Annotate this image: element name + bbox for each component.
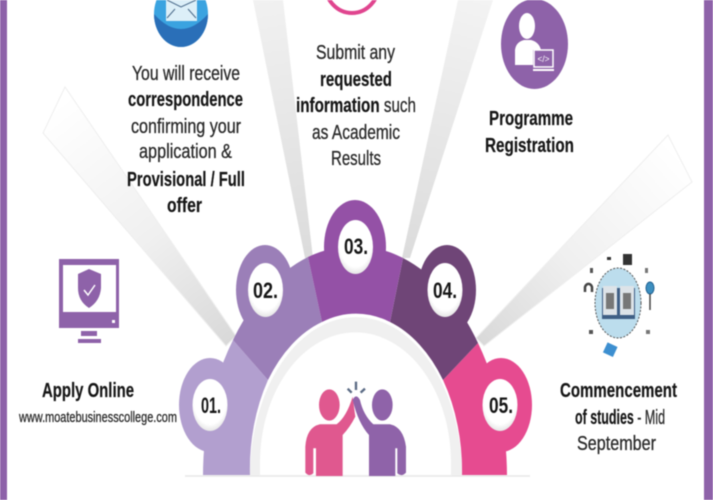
pink person [305, 389, 355, 476]
wedge: step 1 [43, 87, 236, 346]
text: step 2 description: application & [139, 141, 233, 163]
icon: open book with study items [585, 254, 654, 357]
icon: two people high five [305, 382, 406, 476]
number: 01: 01. [201, 393, 221, 418]
text: step 2 description: correspondence [128, 89, 243, 111]
number: 04 [428, 263, 462, 317]
text: step 3 description: as Academic [312, 122, 400, 144]
page border: left [0, 0, 7, 500]
text: step 5 description: September [577, 433, 656, 455]
icon: pink ring [325, 0, 379, 13]
text: step 5 description: of studies - Mid [575, 407, 665, 429]
spark marks [348, 382, 365, 393]
segment 03 [308, 200, 403, 322]
purple person [353, 389, 406, 476]
text: step 2 description: confirming your [131, 116, 241, 138]
number: 04: 04. [433, 278, 457, 303]
text: step 1 description [18, 380, 177, 426]
icon: programmer badge [501, 0, 568, 89]
number: 02 [248, 263, 283, 317]
text: step 3 description: Submit any [316, 42, 395, 64]
text: step 3 description: requested [320, 69, 392, 91]
wedge: step 2 [253, 0, 313, 258]
text: step 3 description [296, 42, 416, 170]
text: step 2 description: Provisional / Full [127, 169, 245, 191]
inner dome [185, 317, 530, 477]
icon: envelope badge [154, 0, 208, 47]
number: 01 [192, 379, 228, 431]
text: step 4 description: Programme [489, 108, 573, 130]
text: step 4 description: Registration [485, 135, 574, 157]
number: 05: 05. [489, 393, 513, 418]
text: step 5 description: Commencement [560, 380, 677, 402]
page border: right [704, 0, 713, 500]
text: step 1 description: Apply Online [42, 380, 134, 402]
text: step 4 description [485, 108, 574, 157]
text: step 2 description: You will receive [132, 63, 240, 85]
text: step 3 description: Results [331, 148, 381, 170]
text: step 2 description [127, 63, 245, 217]
arc diagram [179, 200, 532, 477]
segment 05 [443, 343, 532, 476]
text: step 1 description: www.moatebusinesscollege.com [18, 409, 177, 426]
segment 02 [233, 245, 322, 380]
icon: monitor with shield [59, 259, 119, 343]
number: 02: 02. [253, 278, 278, 303]
wedge: step 4 [476, 135, 692, 346]
text: step 5 description [560, 380, 677, 455]
icon: programmer badge: </> [538, 54, 550, 64]
number: 03 [338, 220, 373, 274]
wedge: step 3 [402, 0, 493, 258]
text: step 2 description: offer [167, 195, 202, 217]
segment 04 [390, 245, 478, 380]
number: 05 [482, 379, 518, 431]
segment 01 [179, 340, 268, 476]
text: step 3 description: information such [296, 95, 416, 117]
number: 03: 03. [344, 234, 368, 259]
